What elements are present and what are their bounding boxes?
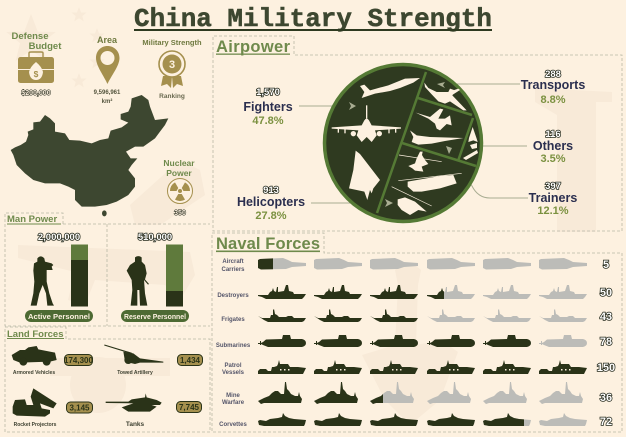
icon: towed artillery xyxy=(104,345,163,364)
label: towed artillery: Towed Artillery xyxy=(117,370,153,376)
area: 9,596,961 xyxy=(94,90,121,96)
row: aircraft carriers: Carriers xyxy=(221,267,245,273)
area xyxy=(94,35,121,105)
icon: reserve soldier xyxy=(127,256,149,306)
defense budget: $200,000 xyxy=(21,90,51,97)
row: submarines: 78 xyxy=(600,336,612,348)
title: China Military Strength xyxy=(134,4,492,34)
label: active personnel: Active Personnel xyxy=(28,312,90,321)
label: active personnel xyxy=(25,310,93,322)
row: frigates: Frigates xyxy=(221,317,245,323)
stat: fighters xyxy=(243,87,293,127)
label: reserve personnel xyxy=(121,310,189,322)
row: corvettes xyxy=(219,413,612,426)
row: mine warfare: 36 xyxy=(600,392,612,404)
military strength ranking: Ranking xyxy=(159,93,185,100)
stat: others: Others xyxy=(533,139,573,153)
leader lines xyxy=(299,84,528,203)
row: patrol vessels: 150 xyxy=(597,362,615,374)
icon: tank xyxy=(106,393,162,412)
transport, trainer and other silhouettes xyxy=(410,83,478,145)
count: rocket projectors: 3,145 xyxy=(69,404,90,412)
row: patrol vessels: Vessels xyxy=(222,370,245,376)
panel: airpower xyxy=(213,36,622,231)
row: destroyers xyxy=(217,285,612,299)
heading: man power: Man Power xyxy=(7,214,57,225)
icon: active soldier xyxy=(31,256,54,306)
area: km² xyxy=(102,98,112,105)
stat: helicopters xyxy=(237,185,305,222)
stat: transports xyxy=(521,69,585,106)
active personnel count: 2,000,000 xyxy=(38,232,80,243)
nuclear power: Nuclear xyxy=(163,158,195,168)
row: aircraft carriers: Aircraft xyxy=(222,259,244,265)
row: mine warfare: Warfare xyxy=(222,400,245,406)
other aircraft silhouettes xyxy=(463,143,478,160)
row: destroyers: Destroyers xyxy=(217,293,249,299)
stat: others: 3.5% xyxy=(540,153,566,165)
label: reserve personnel: Reserve Personnel xyxy=(124,312,186,321)
icon: rocket projector xyxy=(13,388,57,417)
fighter silhouettes xyxy=(332,78,420,142)
stat: fighters: 47.8% xyxy=(252,115,284,127)
stat: others xyxy=(533,129,573,165)
row: corvettes: 72 xyxy=(600,416,612,428)
nuclear power: 350 xyxy=(174,210,186,217)
icon: medal: 3 xyxy=(169,59,175,71)
icon: map pin xyxy=(96,46,120,84)
row: submarines: Submarines xyxy=(216,343,251,349)
heading: airpower: Airpower xyxy=(216,38,291,56)
row: patrol vessels: Patrol xyxy=(224,363,242,369)
stat: others: 116 xyxy=(545,129,561,140)
stat: fighters: Fighters xyxy=(243,100,293,114)
row: patrol vessels xyxy=(222,360,615,376)
reserve personnel count: 510,000 xyxy=(138,232,172,243)
row: mine warfare xyxy=(222,382,612,406)
panel: land forces xyxy=(5,327,210,432)
label: tanks: Tanks xyxy=(126,421,145,428)
military strength ranking: Military Strength xyxy=(142,38,202,47)
icon: briefcase: $ xyxy=(34,69,39,79)
stat: transports: Transports xyxy=(521,78,585,92)
area: Area xyxy=(97,35,118,45)
heading: land forces: Land Forces xyxy=(7,329,64,340)
defense budget: Budget xyxy=(29,41,62,52)
row: corvettes: Corvettes xyxy=(219,422,247,428)
row: destroyers: 50 xyxy=(600,287,612,299)
stat: trainers: Trainers xyxy=(529,191,577,205)
chart: circular aircraft treemap xyxy=(324,64,482,222)
bomber and helicopter silhouettes xyxy=(349,151,462,215)
panel: man power xyxy=(5,213,210,326)
stat: helicopters: 27.8% xyxy=(255,210,287,222)
count: tanks xyxy=(176,402,202,412)
military strength ranking xyxy=(142,38,202,100)
row: frigates xyxy=(221,309,612,323)
nuclear power xyxy=(163,158,195,217)
stat: trainers: 397 xyxy=(545,181,561,192)
icon: radiation xyxy=(168,178,192,204)
stat: helicopters: 913 xyxy=(263,185,279,196)
panel: naval forces xyxy=(212,233,622,432)
count: tanks: 7,745 xyxy=(179,403,200,412)
icon: armored vehicle xyxy=(12,346,57,366)
stat: transports: 288 xyxy=(545,69,561,80)
label: rocket projectors: Rocket Projectors xyxy=(14,422,57,428)
count: armored vehicles: 174,300 xyxy=(64,356,94,365)
row: submarines xyxy=(216,335,612,349)
defense budget xyxy=(12,31,62,97)
stat: fighters: 1,570 xyxy=(256,87,280,98)
row: aircraft carriers: 5 xyxy=(603,259,609,271)
heading: naval forces: Naval Forces xyxy=(216,235,320,253)
row: mine warfare: Mine xyxy=(226,393,240,399)
bar: reserve personnel xyxy=(166,244,183,306)
stat: transports: 8.8% xyxy=(540,94,566,106)
stat: trainers: 12.1% xyxy=(537,205,569,217)
stat: helicopters: Helicopters xyxy=(237,195,305,209)
count: rocket projectors xyxy=(66,402,92,413)
arrows xyxy=(349,82,452,207)
row: frigates: 43 xyxy=(600,311,612,323)
nuclear power: Power xyxy=(166,168,192,178)
count: towed artillery xyxy=(178,354,202,366)
count: towed artillery: 1,434 xyxy=(180,356,201,365)
row: aircraft carriers xyxy=(222,258,610,271)
stat: trainers xyxy=(529,181,577,217)
map of China xyxy=(11,95,168,216)
bar: active personnel xyxy=(71,244,88,306)
defense budget: Defense xyxy=(12,31,48,42)
label: armored vehicles: Armored Vehicles xyxy=(13,370,55,376)
